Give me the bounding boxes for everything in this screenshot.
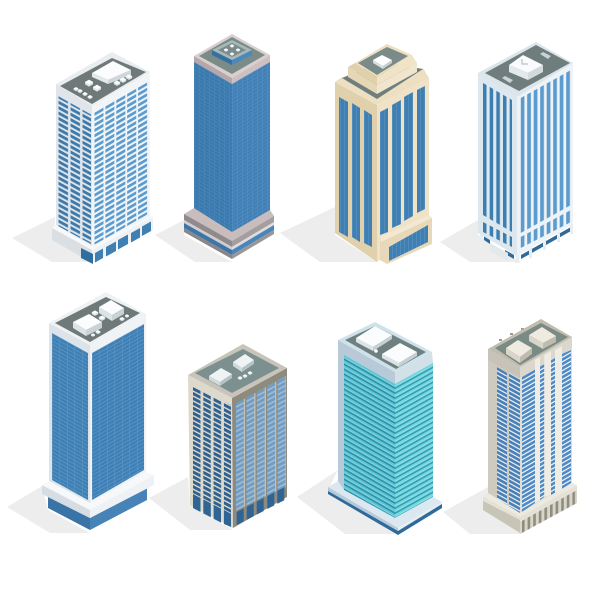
left wall [56, 84, 92, 252]
right windows [522, 350, 571, 512]
left windows [339, 97, 372, 247]
roof units [91, 310, 129, 337]
penthouse [212, 40, 252, 65]
left wall [188, 375, 233, 528]
shoulder roof [342, 62, 423, 99]
roof rim [49, 292, 146, 345]
right windows [235, 376, 286, 511]
left wall [478, 73, 517, 256]
roof boxes [506, 327, 556, 363]
roof boxes [73, 300, 124, 336]
left stripes [483, 83, 512, 247]
building 5: blue glass tower with white frame [7, 292, 154, 533]
lobby windows [81, 222, 151, 264]
roof deck [495, 323, 568, 365]
right glass [395, 363, 433, 518]
base left [52, 228, 92, 263]
building 2: dark blue glass tower [155, 34, 274, 262]
roof deck [199, 37, 265, 74]
right wall [377, 78, 429, 262]
blue base [48, 488, 147, 530]
left windows [58, 96, 91, 244]
right wall [520, 337, 572, 513]
roof rim [194, 34, 270, 78]
podium band [42, 472, 154, 518]
left glass [344, 355, 395, 518]
right frame [90, 314, 146, 503]
ground shadow [155, 220, 232, 262]
left windows [193, 387, 231, 513]
roof rim [188, 344, 287, 398]
entrance pedestal [380, 215, 432, 264]
parapet [488, 337, 572, 378]
right lobby windows [237, 487, 284, 525]
right stripes [521, 70, 571, 248]
left wall [488, 349, 520, 513]
right windows [380, 86, 425, 235]
left lobby windows [193, 494, 231, 527]
ground shadow [280, 207, 377, 262]
roof rim [56, 52, 150, 106]
roof rim [478, 42, 573, 97]
roof box [509, 55, 543, 80]
building 8: taupe tower with ribs [443, 319, 577, 534]
roof deck [195, 349, 279, 393]
left wall [338, 340, 395, 490]
ground shadow [443, 487, 522, 534]
ground shadow [7, 486, 90, 533]
right wall [92, 72, 150, 252]
ground shadow [440, 220, 520, 262]
right wall [517, 63, 573, 256]
building 4: white tower with vertical blue stripes [440, 42, 573, 263]
ribs [535, 346, 562, 503]
soffit [484, 227, 571, 259]
antennas [499, 328, 524, 341]
roof units [356, 326, 417, 367]
left windows [497, 367, 520, 513]
pillars [480, 224, 573, 263]
podium [184, 208, 274, 259]
plinth [328, 481, 442, 535]
right wall [232, 368, 287, 528]
roof units [74, 74, 132, 99]
parapet [194, 55, 270, 84]
left wall [194, 60, 232, 238]
roof boxes [209, 354, 254, 386]
building 3: beige tower with crown [280, 44, 432, 264]
roof vents [502, 52, 551, 83]
crown [348, 44, 417, 94]
ground shadow [149, 477, 233, 530]
upper right band [395, 352, 433, 384]
roof box [373, 55, 392, 69]
ground shadow [297, 470, 395, 534]
right windows [94, 82, 148, 245]
roof deck [485, 45, 570, 91]
cornice [335, 68, 429, 105]
left wall [335, 82, 377, 262]
ground shadow [12, 217, 92, 262]
base [483, 483, 577, 534]
left glass [52, 333, 88, 500]
right wall [232, 60, 270, 238]
roof units [238, 371, 252, 380]
roof deck [345, 326, 426, 369]
roof rim [488, 319, 572, 367]
roof deck [55, 297, 140, 342]
ground floor box [490, 243, 508, 261]
roof rim [338, 322, 432, 372]
base top [52, 216, 153, 250]
building 6: stone grid tower [149, 344, 287, 530]
base right [92, 217, 153, 263]
roof box [92, 61, 131, 84]
roof deck [60, 58, 146, 104]
left frame [49, 323, 90, 503]
right glass [92, 324, 144, 500]
building 7: turquoise glass tower [297, 322, 442, 535]
building 1: white tower with horizontal blue windows [12, 52, 153, 264]
